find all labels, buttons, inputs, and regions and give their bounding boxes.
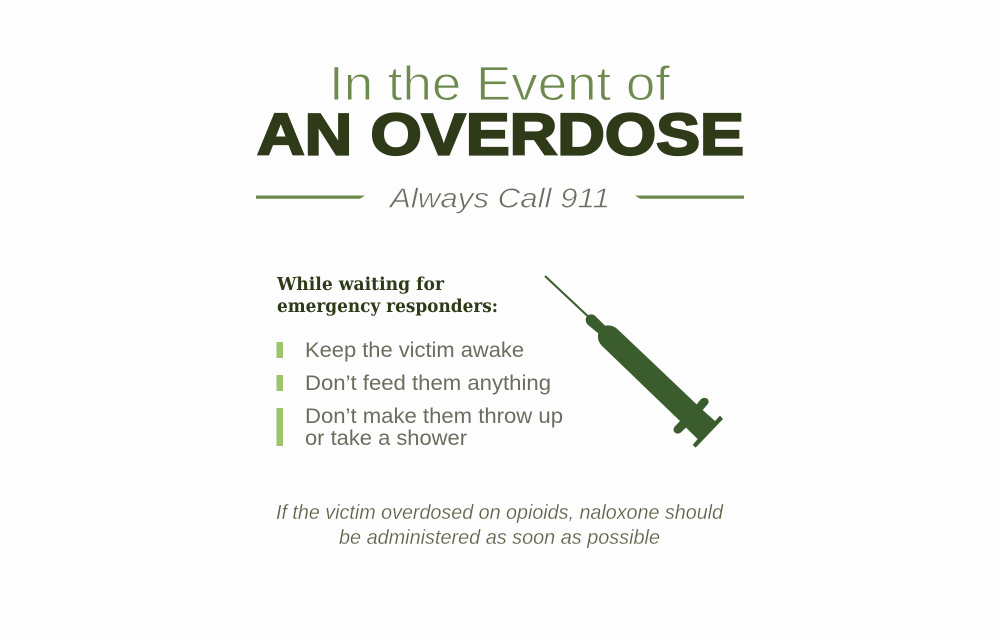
footer note: If the victim overdosed on opioids, naloxone should (276, 502, 724, 524)
divider: right (635, 196, 744, 199)
title: AN OVERDOSE: AN OVERDOSE (257, 102, 744, 168)
heading: while waiting: emergency responders: (277, 297, 498, 317)
heading: while waiting (276, 275, 498, 317)
title: In the Event of: In the Event of (329, 58, 671, 111)
subtitle: Always Call 911: Always Call 911 (388, 182, 610, 214)
icon: syringe (545, 276, 723, 448)
footer note (276, 502, 724, 549)
list item: don't make them throw up: or take a shower (305, 427, 467, 450)
footer note: be administered as soon as possible (339, 527, 660, 549)
list item: don't make them throw up: Don’t make them throw up (305, 405, 563, 428)
list item: keep awake: Keep the victim awake (305, 339, 524, 362)
list item: don't feed: Don’t feed them anything (305, 372, 551, 395)
heading: while waiting: While waiting for (276, 275, 445, 295)
divider: left (256, 196, 365, 199)
list item: don't make them throw up (276, 405, 563, 450)
